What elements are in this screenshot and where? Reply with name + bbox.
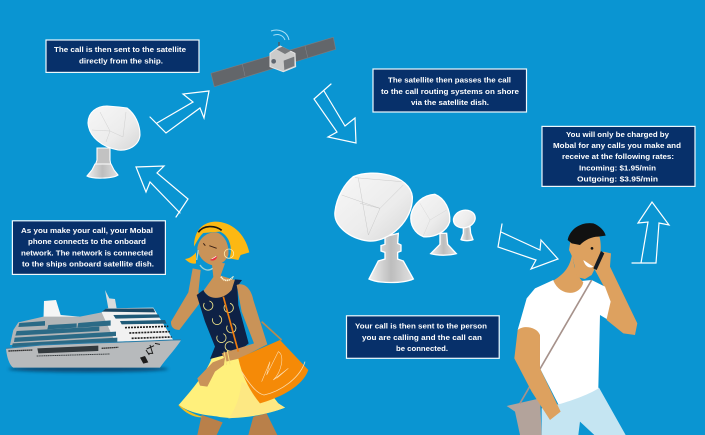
arrow: shore dishes to person (498, 224, 558, 269)
orange bag (238, 340, 308, 403)
icon: satellite (211, 30, 336, 87)
hair (194, 222, 249, 260)
callout: satellite passes call to shore: to the call routing systems on shore (381, 87, 519, 96)
head (197, 232, 228, 266)
medium dish (411, 194, 456, 255)
illustration: man on phone (507, 223, 637, 435)
callout: make your call: phone connects to the onboard (28, 237, 146, 246)
phone (197, 250, 213, 270)
neck and chest (203, 262, 235, 301)
top (197, 279, 249, 359)
skirt (179, 351, 285, 418)
arrow: ship to dish (136, 166, 188, 217)
callout: call sent to satellite: The call is then sent to the satellite (54, 45, 186, 54)
small dish (451, 208, 477, 241)
callout: call sent to satellite: directly from the ship. (79, 56, 163, 66)
hand on hip (197, 358, 225, 387)
callout: charges and rates: Outgoing: $3.95/min (577, 174, 658, 184)
callout: make your call: to the ships onboard satellite dish. (22, 260, 154, 268)
mouth (583, 260, 593, 268)
callout: satellite passes call to shore: The satellite then passes the call (388, 76, 511, 84)
callout: make your call (12, 221, 165, 274)
eye (591, 247, 593, 250)
headband (198, 227, 222, 232)
bracelets (224, 351, 230, 365)
callout: charges and rates (542, 126, 695, 186)
jeans (542, 388, 626, 435)
hair flick (185, 252, 196, 264)
callout: call sent to person: you are calling and the call can (362, 333, 482, 342)
shoulder strap (223, 297, 238, 352)
callout: call sent to person: Your call is then sent to the person (355, 322, 487, 330)
callout: call sent to person (346, 316, 499, 358)
callout: make your call: As you make your call, your Mobal (21, 226, 153, 235)
necklace (221, 276, 233, 280)
callout: charges and rates: receive at the following rates: (562, 152, 674, 161)
hair (568, 223, 606, 245)
callout: make your call: network. The network is connected (21, 248, 153, 258)
callout: charges and rates: Incoming: $1.95/min (579, 164, 656, 172)
crescents (204, 301, 236, 351)
callout: satellite passes call to shore: via the satellite dish. (411, 98, 489, 107)
callout: satellite passes call to shore (373, 69, 526, 112)
large dish (335, 173, 413, 282)
arrow: ship dish to satellite (150, 91, 209, 133)
callout: call sent to person: be connected. (396, 344, 448, 353)
strap (520, 280, 592, 403)
raised arm (595, 252, 637, 335)
illustration: cruise ship (6, 290, 181, 372)
phone (593, 251, 604, 270)
grey bag (507, 398, 542, 435)
head (569, 235, 601, 279)
t-shirt (518, 280, 611, 404)
callout: charges and rates: You will only be charged by (566, 130, 670, 139)
legs (197, 413, 277, 435)
earring (224, 249, 234, 258)
illustration: woman with phone and orange bag (171, 222, 308, 435)
arrow: upward to charges (632, 202, 669, 263)
icon: onboard satellite dish (87, 106, 140, 178)
arrow: satellite to shore dishes (314, 84, 356, 143)
raised arm (171, 268, 203, 330)
neck (553, 253, 583, 293)
callout: call sent to satellite (46, 40, 199, 72)
face details (203, 243, 217, 248)
callout: charges and rates: Mobal for any calls you make and (553, 141, 681, 150)
icon: shore satellite dishes (335, 173, 477, 282)
lower arm (514, 327, 561, 420)
other arm (222, 284, 267, 362)
